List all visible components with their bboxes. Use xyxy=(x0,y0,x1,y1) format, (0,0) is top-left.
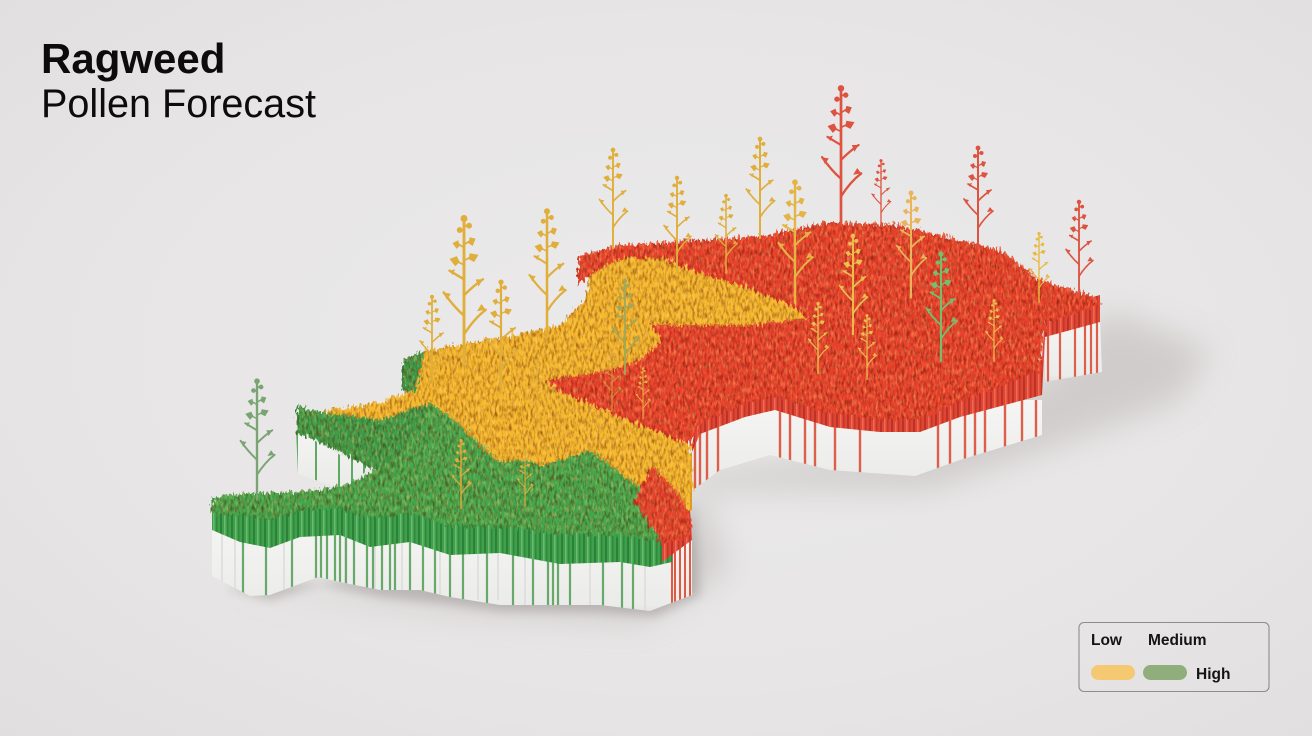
zone: low pollen green front xyxy=(212,403,655,540)
plant: yellow on red low xyxy=(858,314,876,380)
plant: faint orange xyxy=(604,349,621,412)
plant: green left xyxy=(241,378,275,501)
plant: yellow on green 2 xyxy=(517,449,533,507)
plant: red tall xyxy=(822,85,861,226)
contact shadow xyxy=(225,500,700,616)
plant: yellow back 2 xyxy=(746,137,775,239)
ground shadow xyxy=(230,310,1210,622)
plant: red medium xyxy=(964,146,993,250)
right plinth wall xyxy=(690,400,1050,495)
plant: red small xyxy=(872,159,891,227)
legend swatch yellow xyxy=(1091,665,1135,680)
title xyxy=(41,35,316,126)
green zone stems xyxy=(212,503,672,567)
yellow zone stems xyxy=(660,452,692,520)
plant: yellow on red right xyxy=(986,299,1003,362)
plant: orange on red xyxy=(897,191,926,298)
red lobe stems xyxy=(662,510,692,562)
plant: yellow back 3 xyxy=(715,194,737,273)
zone: small red lobe xyxy=(634,466,690,545)
title line 1: Ragweed xyxy=(41,35,225,82)
plant: yellow mid 1 xyxy=(530,208,566,339)
legend label low: Low xyxy=(1091,632,1123,649)
front plinth wall xyxy=(212,530,692,611)
legend swatch green xyxy=(1143,665,1187,680)
plant: yellow mid 2 xyxy=(486,279,517,393)
back left plinth wall xyxy=(296,430,365,488)
plant: yellow on red center xyxy=(839,234,868,335)
plant: faint yellow xyxy=(527,359,548,432)
plant: yellow mid 3 xyxy=(444,215,486,366)
far right plinth wall xyxy=(1045,322,1102,382)
plant: red right xyxy=(1066,200,1093,297)
zone: medium pollen yellow xyxy=(320,258,808,505)
ragweed plants xyxy=(241,85,1093,509)
plant: yellow back 5 xyxy=(599,148,628,249)
plant: yellow on red low left xyxy=(808,302,828,374)
back green nub xyxy=(402,351,430,395)
zone: high pollen red xyxy=(545,222,1100,445)
legend label medium: Medium xyxy=(1148,632,1207,649)
plant: small orange xyxy=(636,367,650,420)
map terrain xyxy=(205,222,1105,620)
plant: yellow on green 1 xyxy=(452,439,471,509)
plant: yellow mid 4 xyxy=(420,295,445,385)
plant: yellow back 1 xyxy=(778,179,813,304)
plant: green on red xyxy=(926,252,957,362)
red high zone stems xyxy=(692,295,1100,452)
title line 2: Pollen Forecast xyxy=(41,82,316,126)
zone: low pollen green back left xyxy=(297,403,470,470)
plant: yellow back 4 xyxy=(664,176,691,273)
legend label high: High xyxy=(1196,666,1230,683)
legend frame xyxy=(1079,622,1269,692)
legend xyxy=(1079,622,1269,692)
plant: grey green on yellow xyxy=(612,279,639,375)
plant: yellow right edge xyxy=(1029,232,1049,303)
